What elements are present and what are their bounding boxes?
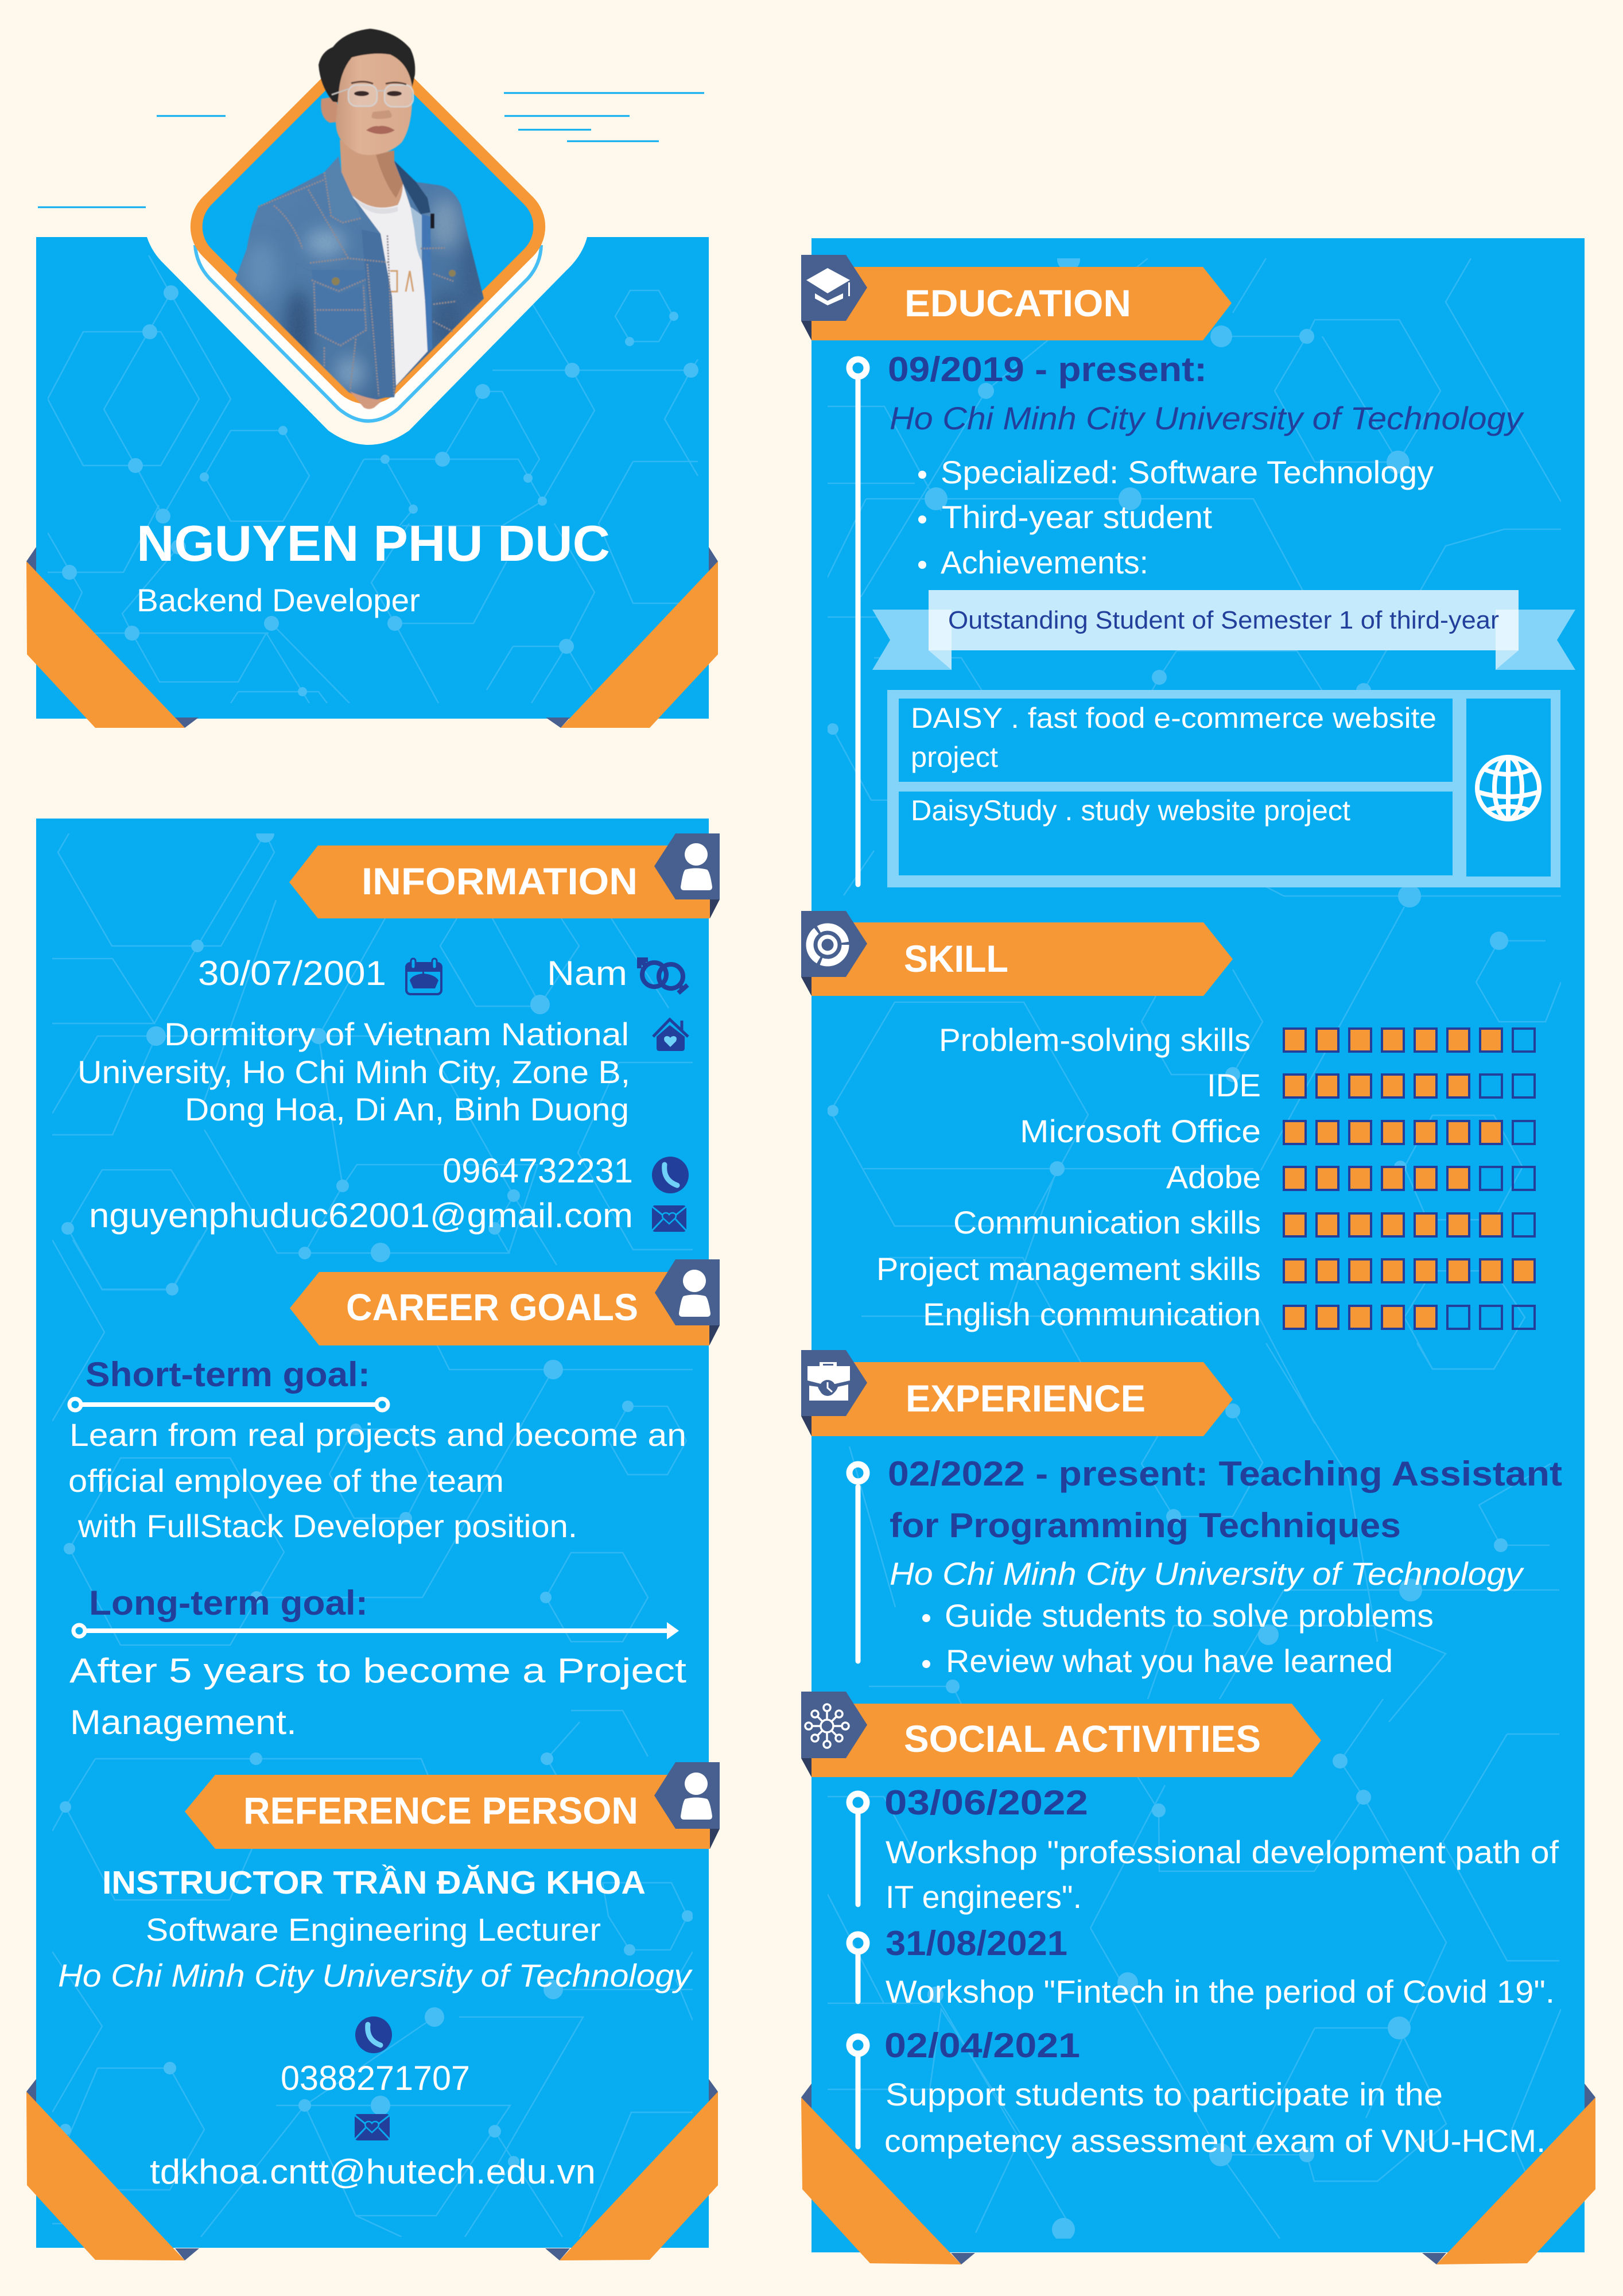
icon: phone — [355, 2016, 392, 2053]
banner: achievement: Outstanding Student of Semester 1 of third-year — [948, 606, 1499, 634]
text: address: Dong Hoa, Di An, Binh Duong — [185, 1091, 629, 1127]
panel: profile — [36, 237, 709, 719]
section header: reference person — [185, 1762, 720, 1849]
icon: phone — [652, 1157, 689, 1193]
activity: 02/04/2021: competency assessment exam of VNU-HCM. — [884, 2123, 1546, 2159]
block: experience entry: Guide students to solve problems — [945, 1597, 1434, 1634]
skill row: communication — [953, 1204, 1535, 1240]
block: education entry: Ho Chi Minh City University of Technology — [890, 400, 1524, 436]
block: reference details: Software Engineering Lecturer — [146, 1911, 601, 1948]
section header: career goals: CAREER GOALS — [346, 1286, 638, 1328]
activity: 02/04/2021: 02/04/2021 — [884, 2026, 1080, 2065]
activity: 03/06/2022: 03/06/2022 — [884, 1783, 1088, 1822]
text: birth date: 30/07/2001 — [198, 954, 386, 992]
activity: 02/04/2021 — [849, 2026, 1546, 2159]
heading: name: NGUYEN PHU DUC — [137, 515, 610, 572]
block: short-term goal: official employee of the team — [68, 1463, 504, 1499]
block: experience entry: 02/2022 - present: Teaching Assistant — [888, 1455, 1562, 1493]
block: education entry: Third-year student — [942, 499, 1212, 535]
icon: envelope — [355, 2114, 390, 2140]
corner ribbons: main column — [801, 2084, 1595, 2264]
project table — [887, 690, 1560, 887]
activity: 31/08/2021: 31/08/2021 — [886, 1924, 1067, 1963]
activity: 31/08/2021: Workshop "Fintech in the period of Covid 19". — [886, 1973, 1555, 2010]
skill row: problem solving: Problem-solving skills — [939, 1022, 1251, 1058]
timeline: education — [849, 359, 867, 885]
text: address: Dormitory of Vietnam National — [164, 1016, 629, 1052]
skill row: english — [923, 1296, 1535, 1332]
block: education entry: Achievements: — [941, 544, 1148, 580]
block: reference details: Ho Chi Minh City University of Technology — [58, 1957, 693, 1994]
icon: person — [679, 1270, 710, 1317]
icon: gender — [639, 960, 688, 993]
section header: education: EDUCATION — [904, 282, 1131, 324]
skill row: communication: Communication skills — [953, 1204, 1261, 1240]
skill list — [876, 1022, 1535, 1332]
block: short-term goal: Learn from real projects and become an — [69, 1417, 686, 1453]
decorative lines — [38, 93, 704, 207]
text: reference phone: 0388271707 — [281, 2059, 470, 2097]
skill row: microsoft office: Microsoft Office — [1020, 1113, 1261, 1149]
section header: reference person: REFERENCE PERSON — [243, 1789, 638, 1832]
icon: house — [653, 1019, 688, 1051]
section header: education — [801, 255, 1232, 340]
block: education entry: 09/2019 - present: — [888, 350, 1207, 389]
section header: experience — [801, 1350, 1233, 1436]
block: long-term goal: Long-term goal: — [89, 1584, 368, 1622]
banner: achievement — [872, 590, 1575, 670]
icon: globe — [1477, 757, 1539, 819]
skill row: problem solving — [939, 1022, 1535, 1058]
icon: graduation cap — [806, 268, 850, 305]
project table: project — [911, 741, 998, 773]
skill row: IDE: IDE — [1207, 1067, 1261, 1103]
block: experience entry — [888, 1455, 1562, 1679]
icon: person — [681, 843, 712, 890]
corner ribbons: information column — [26, 2079, 718, 2260]
skill row: english: English communication — [923, 1296, 1261, 1332]
activity: 31/08/2021 — [849, 1924, 1555, 2010]
text: job title: Backend Developer — [137, 582, 420, 618]
panel: main column — [812, 238, 1585, 2252]
text: phone: 0964732231 — [442, 1151, 633, 1190]
block: long-term goal: After 5 years to become a Project — [69, 1651, 686, 1690]
icon: briefcase with clock — [807, 1362, 850, 1401]
text: address: University, Ho Chi Minh City, Zone B, — [77, 1054, 630, 1090]
text: gender: Nam — [547, 954, 627, 992]
block: long-term goal: Management. — [70, 1703, 297, 1742]
text: address — [77, 1016, 630, 1127]
block: short-term goal: with FullStack Developer position. — [77, 1508, 577, 1544]
section header: skill: SKILL — [904, 937, 1008, 980]
skill row: microsoft office — [1020, 1113, 1535, 1149]
section header: experience: EXPERIENCE — [906, 1377, 1146, 1420]
block: reference details — [58, 1864, 693, 1994]
panel: information column — [36, 819, 709, 2248]
section header: information: INFORMATION — [362, 860, 638, 902]
block: short-term goal — [68, 1355, 686, 1544]
timeline: experience — [849, 1464, 867, 1661]
project table: DAISY . fast food e-commerce website — [911, 702, 1436, 734]
block: experience entry: Ho Chi Minh City University of Technology — [890, 1556, 1524, 1592]
skill row: adobe: Adobe — [1166, 1159, 1261, 1195]
block: education entry: Specialized: Software Technology — [941, 454, 1434, 490]
icon: envelope — [652, 1205, 686, 1232]
icon: calendar — [406, 959, 441, 994]
block: experience entry: for Programming Techniques — [890, 1506, 1401, 1545]
section header: information — [289, 833, 720, 918]
block: education entry — [888, 350, 1524, 580]
skill row: IDE — [1207, 1067, 1535, 1103]
activity: 02/04/2021: Support students to participate in the — [886, 2076, 1443, 2112]
section header: skill — [801, 911, 1233, 996]
activity: 03/06/2022 — [849, 1783, 1559, 1915]
skill row: adobe — [1166, 1159, 1535, 1195]
block: long-term goal — [69, 1584, 686, 1742]
section header: career goals — [290, 1259, 720, 1345]
block: reference details: INSTRUCTOR TRẦN ĐĂNG KHOA — [102, 1864, 646, 1901]
block: short-term goal: Short-term goal: — [86, 1355, 370, 1394]
profile photo frame — [173, 32, 562, 421]
icon: network — [805, 1704, 849, 1748]
icon: target — [810, 927, 845, 963]
activity: 03/06/2022: IT engineers". — [886, 1879, 1082, 1915]
block: experience entry: Review what you have learned — [946, 1643, 1393, 1679]
activity: 03/06/2022: Workshop "professional development path of — [886, 1834, 1559, 1870]
text: email: nguyenphuduc62001@gmail.com — [89, 1196, 633, 1235]
section header: social activities — [801, 1692, 1321, 1777]
portrait photo — [230, 29, 494, 409]
section header: social activities: SOCIAL ACTIVITIES — [904, 1717, 1261, 1760]
corner ribbons: profile — [26, 547, 718, 728]
project table: DaisyStudy . study website project — [911, 794, 1350, 827]
text: reference email: tdkhoa.cntt@hutech.edu.vn — [150, 2152, 596, 2191]
skill row: project management: Project management skills — [876, 1251, 1261, 1287]
icon: person — [681, 1773, 712, 1820]
skill row: project management — [876, 1251, 1535, 1287]
